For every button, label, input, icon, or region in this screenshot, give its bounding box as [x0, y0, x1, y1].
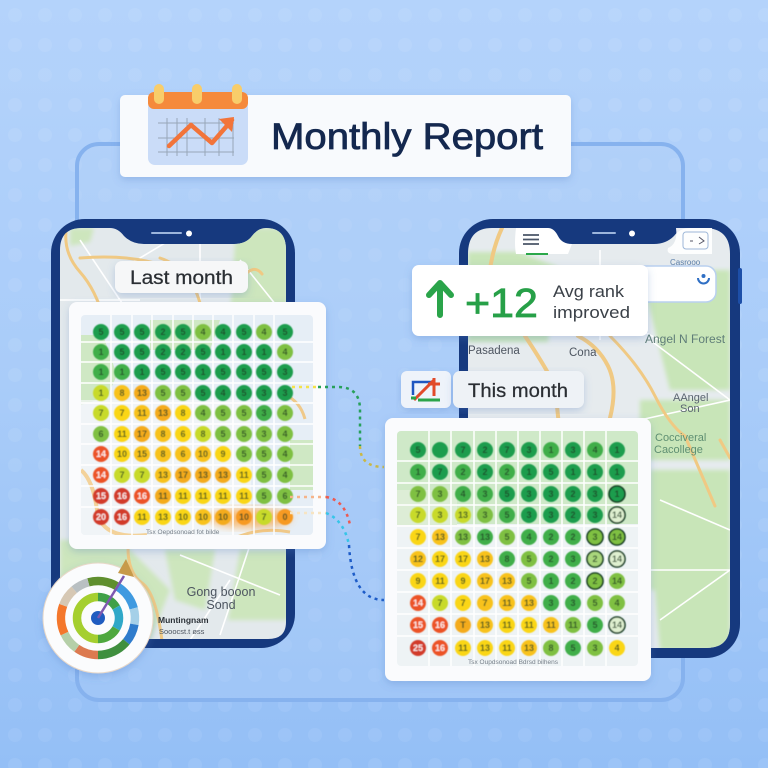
dot grid: this month: 13: [480, 532, 490, 542]
dot grid: this month: 2: [482, 467, 488, 477]
dot grid: this month: 7: [415, 510, 421, 520]
dot grid: last month: 5: [261, 449, 267, 459]
dot grid: this month: 12: [413, 554, 423, 564]
dot grid: last month: [93, 324, 293, 525]
dot grid: last month: 5: [200, 388, 206, 398]
dot grid: last month: 1: [98, 367, 104, 377]
dot grid: this month: 13: [502, 576, 512, 586]
dot grid: last month: 1: [261, 347, 267, 357]
dot grid: this month: 11: [502, 643, 512, 653]
dot grid: this month: 3: [526, 445, 532, 455]
dot grid: this month: 11: [458, 643, 468, 653]
dot grid: last month: 15: [96, 491, 106, 501]
dot grid: this month: 1: [614, 489, 620, 499]
dot grid: last month: 10: [218, 512, 228, 522]
dot grid: last month: 4: [220, 327, 226, 337]
dot grid: last month: 11: [178, 491, 188, 501]
dot grid: this month: 9: [460, 576, 466, 586]
dot grid: last month: 5: [241, 388, 247, 398]
dot grid: last month: 10: [117, 449, 127, 459]
dot grid: last month: 8: [200, 429, 206, 439]
dot grid: this month: 4: [526, 532, 532, 542]
dot grid: this month: 25: [413, 643, 423, 653]
dot grid: last month: 7: [119, 470, 125, 480]
map: this month: Son: [680, 403, 700, 415]
dot grid: this month: 13: [480, 620, 490, 630]
dot grid: this month: 16: [435, 643, 445, 653]
dot grid: this month: 7: [415, 489, 421, 499]
dot grid: this month: 2: [548, 532, 554, 542]
dot grid: this month: 5: [570, 643, 576, 653]
dot grid: last month: 10: [239, 512, 249, 522]
dot grid: last month: 5: [119, 327, 125, 337]
dot grid: this month: 5: [548, 467, 554, 477]
dot grid: last month: 5: [220, 429, 226, 439]
stat card: +12 avg rank improved: +12: [465, 280, 538, 326]
dot grid: this month: 2: [570, 510, 576, 520]
dot grid: last month: 5: [139, 347, 145, 357]
dot grid: this month: 5: [592, 598, 598, 608]
dot grid: last month: 5: [261, 491, 267, 501]
dot grid: last month: 11: [239, 491, 249, 501]
dot grid: this month: 13: [458, 510, 468, 520]
dot grid: last month: 5: [160, 388, 166, 398]
dot grid: this month: 1: [526, 467, 532, 477]
dot grid: last month: 16: [137, 491, 147, 501]
dot grid: this month: 5: [592, 620, 598, 630]
dot grid: this month: 3: [437, 489, 443, 499]
dot grid: this month: 8: [504, 554, 510, 564]
label: last month: Last month: [130, 268, 233, 289]
dot grid: this month: 3: [570, 598, 576, 608]
dot grid: last month: 11: [239, 470, 249, 480]
dot grid: last month: 15: [137, 449, 147, 459]
dot grid: this month: 5: [504, 510, 510, 520]
dot grid: last month: 20: [96, 512, 106, 522]
dot grid: last month: 4: [282, 347, 288, 357]
dot grid: this month: 2: [504, 467, 510, 477]
map: this month: Casrooo: [670, 258, 701, 267]
dot grid: last month: 8: [119, 388, 125, 398]
panel: this month heatmap: [385, 418, 651, 681]
dot grid: last month: 5: [241, 429, 247, 439]
dot grid: this month: 1: [548, 445, 554, 455]
dot grid: this month: 2: [482, 445, 488, 455]
dot grid: this month: 7: [504, 445, 510, 455]
dot grid: last month: 8: [160, 449, 166, 459]
dot grid: last month: 11: [218, 491, 228, 501]
outer frame: [77, 144, 683, 700]
dot grid: last month: 11: [158, 491, 168, 501]
dot grid: this month: 13: [480, 643, 490, 653]
dot grid: last month: 7: [98, 408, 104, 418]
dot grid: last month: 5: [180, 367, 186, 377]
dot grid: last month: 0: [282, 512, 288, 522]
map: last month: Muntingnam: [158, 615, 209, 625]
dot grid: last month: 3: [261, 408, 267, 418]
connector: lower dotted: [290, 497, 384, 600]
dot grid: this month: 11: [546, 620, 556, 630]
dot grid: this month: 3: [482, 489, 488, 499]
dot grid: this month: 17: [435, 554, 445, 564]
dot grid: this month: 2: [570, 532, 576, 542]
dot grid: last month: 5: [180, 327, 186, 337]
dot grid: last month: 8: [180, 408, 186, 418]
dot grid: last month: 6: [180, 429, 186, 439]
dot grid: this month: [410, 442, 625, 656]
dot grid: last month: 3: [282, 388, 288, 398]
dot grid: last month: 4: [261, 327, 267, 337]
heading: Monthly Report: [271, 116, 544, 157]
dot grid: last month: 5: [160, 367, 166, 377]
dot grid: last month: 4: [282, 429, 288, 439]
dot grid: last month: 11: [137, 408, 147, 418]
dot grid: last month: 5: [282, 327, 288, 337]
dot grid: this month: 13: [524, 643, 534, 653]
dot grid: last month: 2: [160, 327, 166, 337]
dot grid: this month: 15: [413, 620, 423, 630]
dot grid: last month: 10: [198, 512, 208, 522]
phone: last month: [51, 219, 295, 648]
dot grid: last month: 5: [261, 470, 267, 480]
dot grid: last month: 4: [200, 408, 206, 418]
dot grid: this month: 4: [614, 643, 620, 653]
dot grid: this month: 7: [437, 598, 443, 608]
dot grid: last month: 6: [180, 449, 186, 459]
dot grid: this month: 13: [524, 598, 534, 608]
dot grid: this month: 11: [568, 620, 578, 630]
dot grid: this month: 3: [548, 598, 554, 608]
dot grid: last month: 1: [98, 388, 104, 398]
map: this month: Pasadena: [468, 345, 520, 357]
dot grid: last month: 6: [282, 491, 288, 501]
dot grid: last month: 2: [160, 347, 166, 357]
label: this month: [453, 371, 584, 408]
icon: calendar chart: [148, 84, 248, 165]
dot grid: this month: 17: [480, 576, 490, 586]
dot grid: this month: 2: [592, 576, 598, 586]
dot grid: last month: 4: [200, 327, 206, 337]
dot grid: last month: 14: [96, 470, 106, 480]
dot grid: this month: 9: [415, 576, 421, 586]
dot grid: last month: 3: [261, 388, 267, 398]
dot grid: last month: 5: [241, 327, 247, 337]
map: this month: Cona: [569, 347, 597, 359]
dot grid: last month: 2: [180, 347, 186, 357]
panel: last month heatmap: [69, 302, 326, 549]
dot grid: this month: 16: [435, 620, 445, 630]
title card: [120, 84, 571, 177]
dot grid: last month: 5: [241, 367, 247, 377]
dot grid: last month: 13: [158, 470, 168, 480]
dot grid: this month: 13: [480, 554, 490, 564]
dot grid: this month: 1: [548, 576, 554, 586]
dot grid: this month: 11: [502, 598, 512, 608]
dot grid: this month: 1: [614, 467, 620, 477]
dot grid: this month: 2: [570, 489, 576, 499]
map: last month: Sond: [206, 598, 236, 612]
dot grid: last month: 4: [220, 388, 226, 398]
dot grid: last month: 9: [220, 449, 226, 459]
map: this month: Angel N Forest: [645, 332, 726, 346]
label: this month: This month: [468, 381, 568, 402]
dot grid: this month: 2: [592, 554, 598, 564]
map: last month: Gong booon: [187, 585, 255, 599]
dot grid: last month: 14: [96, 449, 106, 459]
dot grid: last month: 5: [261, 367, 267, 377]
dot grid: last month: 11: [198, 491, 208, 501]
dot grid: this month: 13: [435, 532, 445, 542]
map: this month: AAngel: [673, 392, 708, 404]
dot grid: last month: 1: [139, 367, 145, 377]
dot grid: this month: 1: [415, 467, 421, 477]
dot grid: this month: 3: [526, 489, 532, 499]
dot grid: this month: 7: [415, 532, 421, 542]
dot grid: this month: 3: [548, 489, 554, 499]
dot grid: this month: 7: [482, 598, 488, 608]
icon: this month badge: [401, 371, 451, 408]
dot grid: this month: 4: [592, 445, 598, 455]
dot grid: this month: 5: [415, 445, 421, 455]
dot grid: this month: 14: [413, 598, 423, 608]
dot grid: last month: 7: [119, 408, 125, 418]
dot grid: last month: 5: [98, 327, 104, 337]
map: this month: [464, 225, 734, 653]
grid map: [81, 315, 313, 540]
dot grid: this month: 3: [437, 510, 443, 520]
dot grid: this month: 7: [437, 467, 443, 477]
stat card: +12 avg rank improved: Avg rank: [553, 282, 625, 301]
dot grid: this month: 3: [592, 532, 598, 542]
dot grid: last month: 7: [261, 512, 267, 522]
dot grid: last month: 17: [178, 470, 188, 480]
phone speaker: [592, 230, 635, 236]
dot grid: this month: 2: [570, 576, 576, 586]
dot grid: last month: 5: [220, 408, 226, 418]
dot grid: last month: 1: [220, 347, 226, 357]
dot grid: last month: 1: [98, 347, 104, 357]
dot grid: this month: 11: [435, 576, 445, 586]
dot grid: last month: 5: [139, 327, 145, 337]
dot grid: this month: 3: [548, 510, 554, 520]
dot grid: last month: 5: [241, 449, 247, 459]
dot grid: this month: 14: [612, 554, 622, 564]
dot grid: last month: 13: [158, 512, 168, 522]
icon: up arrow: [429, 283, 451, 315]
dot grid: last month: 10: [198, 449, 208, 459]
dot grid: last month: 13: [198, 470, 208, 480]
dot grid: this month: 3: [570, 445, 576, 455]
dot grid: last month: 10: [178, 512, 188, 522]
dot grid: this month: 1: [592, 467, 598, 477]
dot grid: last month: 6: [98, 429, 104, 439]
dot grid: this month: 13: [458, 532, 468, 542]
dot grid: this month: 5: [526, 554, 532, 564]
stat card: +12 avg rank improved: [412, 265, 648, 336]
dot grid: last month: 8: [160, 429, 166, 439]
dot grid: this month: 3: [482, 510, 488, 520]
dot grid: last month: 13: [218, 470, 228, 480]
dot grid: this month: 3: [592, 489, 598, 499]
dot grid: this month: 4: [460, 489, 466, 499]
dot grid: this month: 7: [460, 445, 466, 455]
dot grid: last month: 11: [137, 512, 147, 522]
dot grid: this month: T: [460, 620, 466, 630]
menu tab: [515, 228, 572, 254]
dot grid: last month: 13: [158, 408, 168, 418]
dot grid: this month: 5: [504, 489, 510, 499]
map button: [668, 228, 712, 254]
dot grid: this month: 3: [526, 510, 532, 520]
dot grid: this month: 11: [502, 620, 512, 630]
map: last month: Sooocst.t øss: [159, 627, 205, 636]
dot grid: last month: 16: [117, 491, 127, 501]
grid caption: Tsx Oepdsonoad fot bilde: [146, 529, 220, 536]
dot grid: last month: 5: [119, 347, 125, 357]
dot grid: last month: 17: [137, 429, 147, 439]
icon: target dial: [43, 559, 153, 673]
dot grid: this month: 1: [614, 445, 620, 455]
dot grid: last month: 5: [220, 367, 226, 377]
dot grid: last month: 5: [200, 347, 206, 357]
dot grid: last month: 11: [117, 429, 127, 439]
map: last month: [55, 225, 291, 645]
dot grid: this month: 5: [526, 576, 532, 586]
connector: upper dotted: [292, 387, 384, 467]
dot grid: last month: 3: [261, 429, 267, 439]
dot grid: this month: 2: [548, 554, 554, 564]
dot grid: last month: 4: [282, 408, 288, 418]
grid map: [397, 431, 638, 666]
grid caption: Tsx Oupdsonoad Bdrsd bilhens: [468, 659, 559, 666]
dot grid: this month: 14: [612, 532, 622, 542]
dot grid: this month: 1: [570, 467, 576, 477]
dot grid: this month: 14: [612, 620, 622, 630]
map: this month: Cocciveral: [655, 432, 706, 444]
dot grid: this month: 3: [592, 510, 598, 520]
dot grid: last month: 5: [180, 388, 186, 398]
dot grid: this month: 11: [524, 620, 534, 630]
dot grid: last month: 5: [241, 408, 247, 418]
dot grid: this month: 5: [504, 532, 510, 542]
phone speaker: [151, 230, 192, 236]
dot grid: this month: 3: [592, 643, 598, 653]
dot grid: this month: 4: [614, 598, 620, 608]
dot grid: this month: 8: [548, 643, 554, 653]
label: last month: [115, 261, 248, 293]
dot grid: this month: 14: [612, 576, 622, 586]
dot grid: this month: 14: [612, 510, 622, 520]
dot grid: last month: 1: [241, 347, 247, 357]
dot grid: last month: 7: [139, 470, 145, 480]
map: this month: Cacollege: [654, 444, 703, 456]
dot grid: last month: 1: [200, 367, 206, 377]
dot grid: last month: 4: [282, 470, 288, 480]
phone: this month: [459, 219, 742, 658]
dot grid: this month: 17: [458, 554, 468, 564]
dot grid: last month: 3: [282, 367, 288, 377]
dot grid: last month: 13: [137, 388, 147, 398]
dot grid: last month: 1: [119, 367, 125, 377]
stat card: +12 avg rank improved: improved: [553, 303, 630, 322]
dot grid: last month: 16: [117, 512, 127, 522]
dot grid: this month: 2: [460, 467, 466, 477]
dot grid: this month: 3: [570, 554, 576, 564]
dot grid: this month: 7: [460, 598, 466, 608]
dot grid: last month: 4: [282, 449, 288, 459]
